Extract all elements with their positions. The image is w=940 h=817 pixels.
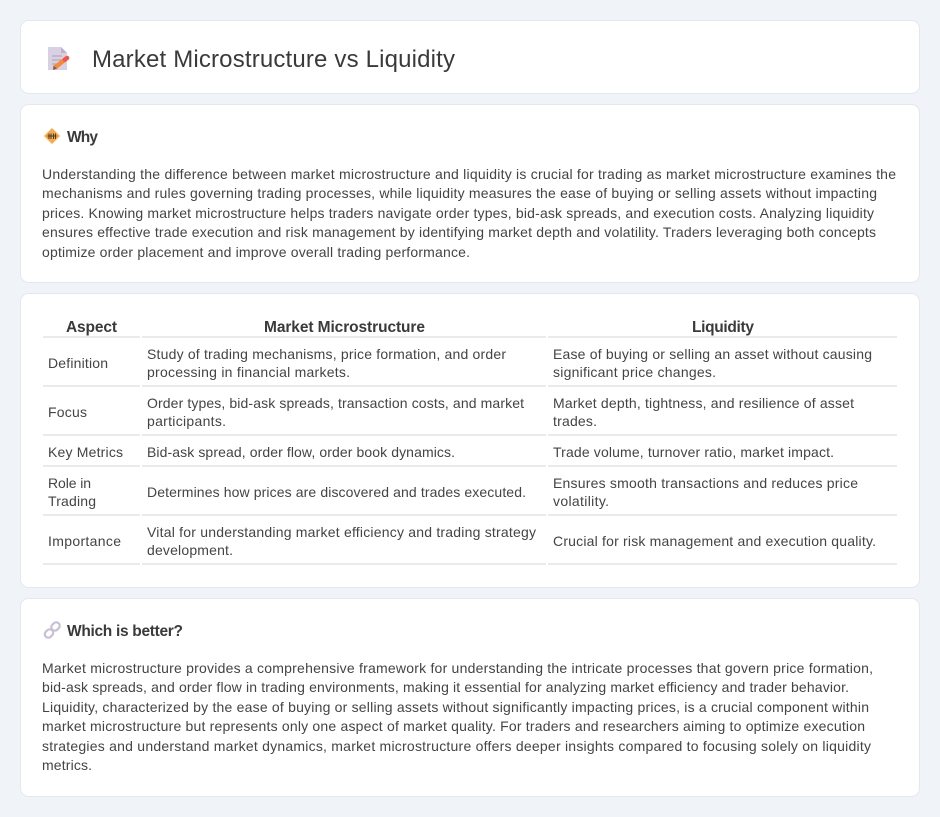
row: definition: Study of trading mechanisms, price formation, and order — [147, 346, 506, 362]
icon: document with pencil — [48, 47, 67, 70]
table header — [66, 319, 754, 336]
icon: link — [43, 621, 61, 639]
row: definition — [48, 346, 872, 380]
heading: why: Why — [67, 129, 98, 146]
row: key metrics — [48, 444, 834, 460]
row: key metrics: Key Metrics — [48, 444, 123, 460]
row: importance: Crucial for risk management and execution quality. — [553, 533, 876, 549]
table header: Market Microstructure — [264, 319, 425, 336]
row: role in trading: Trading — [48, 493, 96, 509]
text block: why: mechanisms and rules governing trading processes, while liquidity measures the ease of buying or selling assets without impacting — [42, 185, 877, 201]
row: focus: trades. — [553, 413, 597, 429]
text block: which is better — [42, 660, 873, 773]
row: role in trading: Role in — [48, 475, 91, 491]
row: focus — [48, 395, 854, 429]
row: definition: processing in financial markets. — [147, 364, 350, 380]
table header: Aspect — [66, 319, 117, 336]
text block: why: Understanding the difference between market microstructure and liquidity is crucial for trading as market microstructure examines the — [42, 166, 896, 182]
row: role in trading: volatility. — [553, 493, 609, 509]
icon: warning diamond — [44, 128, 60, 144]
panel: comparison table — [20, 294, 920, 588]
row: focus: Order types, bid-ask spreads, transaction costs, and market — [147, 395, 524, 411]
text block: why: optimize order placement and improve overall trading performance. — [42, 244, 470, 260]
row: definition: Definition — [48, 355, 108, 371]
row: focus: participants. — [147, 413, 226, 429]
row: focus: Focus — [48, 404, 87, 420]
panel: which is better — [20, 598, 920, 796]
row: definition: significant price changes. — [553, 364, 716, 380]
text block: which is better: Market microstructure provides a comprehensive framework for understanding the intricate processes that govern price formation, — [42, 660, 873, 676]
text block: why — [42, 166, 896, 260]
row: importance: Importance — [48, 533, 121, 549]
text block: why: prices. Knowing market microstructure helps traders navigate order types, bid-ask spreads, and execution costs. Analyzing liquidity — [42, 205, 874, 221]
row: role in trading: Determines how prices are discovered and trades executed. — [147, 484, 526, 500]
row: key metrics: Bid-ask spread, order flow, order book dynamics. — [147, 444, 455, 460]
text block: which is better: strategies and understand market dynamics, market microstructure offers deeper insights compared to focusing solely on liquidity — [42, 738, 871, 754]
title: Market Microstructure vs Liquidity — [92, 46, 455, 73]
text block: which is better: Liquidity, characterized by the ease of buying or selling assets without significantly impacting prices, is a crucial component within — [42, 699, 869, 715]
panel: why — [20, 104, 920, 282]
row: importance: Vital for understanding market efficiency and trading strategy — [147, 524, 536, 540]
panel: header — [20, 20, 920, 94]
row: importance: development. — [147, 542, 233, 558]
heading: which is better: Which is better? — [67, 623, 183, 640]
row: focus: Market depth, tightness, and resilience of asset — [553, 395, 854, 411]
text block: which is better: metrics. — [42, 757, 92, 773]
table header: Liquidity — [692, 319, 754, 336]
text block: which is better: market microstructure but represents only one aspect of market quality. For traders and researchers aiming to optimize execution — [42, 718, 865, 734]
text block: why: ensures effective trade execution and risk management by identifying market depth and volatility. Traders leveraging both concepts — [42, 224, 876, 240]
row: definition: Ease of buying or selling an asset without causing — [553, 346, 872, 362]
row: role in trading — [48, 475, 858, 509]
text block: which is better: bid-ask spreads, and order flow in trading environments, making it essential for analyzing market efficiency and trader behavior. — [42, 679, 849, 695]
row: role in trading: Ensures smooth transactions and reduces price — [553, 475, 858, 491]
row: importance — [48, 524, 876, 558]
row: key metrics: Trade volume, turnover ratio, market impact. — [553, 444, 834, 460]
